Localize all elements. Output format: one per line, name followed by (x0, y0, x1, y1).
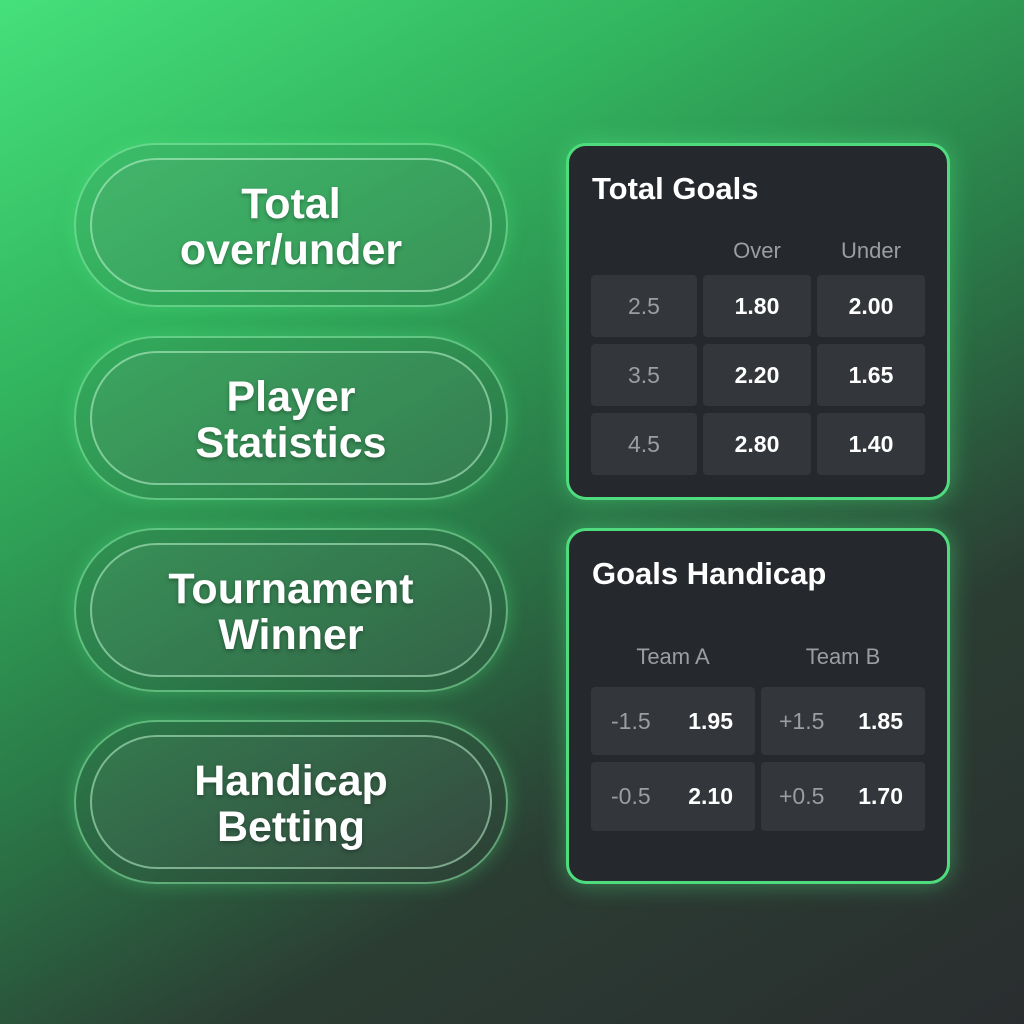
heading: Goals Handicap (592, 556, 826, 591)
panel: Goals Handicap (566, 528, 950, 884)
pill: Player Statistics: Player (226, 373, 356, 421)
pill: Total over/under: Total (241, 180, 341, 228)
panel: Total Goals: 2.00 (849, 292, 893, 318)
header Under: Under (841, 238, 901, 263)
panel: Goals Handicap: +0.5 (779, 783, 824, 809)
panel: Total Goals: 1.65 (849, 362, 893, 388)
pill: Tournament Winner (74, 528, 508, 692)
panel: Goals Handicap: 2.10 (688, 783, 733, 809)
pill: Tournament Winner: Winner (218, 611, 364, 659)
panel: Total Goals: 1.40 (849, 430, 893, 456)
panel: Goals Handicap: 1.70 (858, 783, 903, 809)
panel: Goals Handicap: 1.95 (688, 708, 733, 734)
panel: Total Goals (566, 143, 950, 500)
panel: Total Goals: 2.5 (628, 292, 660, 318)
panel: Total Goals: 3.5 (628, 362, 660, 388)
pill: Total over/under: over/under (180, 226, 402, 274)
header Over: Over (733, 238, 781, 263)
heading: Total Goals (592, 171, 759, 206)
panel: Total Goals: 4.5 (628, 430, 660, 456)
pill: Handicap Betting: Betting (217, 803, 365, 851)
panel: Total Goals: 1.80 (735, 292, 779, 318)
panel: Goals Handicap: -1.5 (611, 708, 651, 734)
panel: Goals Handicap: -0.5 (611, 783, 651, 809)
panel: Total Goals: 2.20 (735, 362, 779, 388)
table (591, 275, 925, 475)
table (591, 687, 925, 831)
pill: Total over/under (74, 143, 508, 307)
pill: Handicap Betting: Handicap (194, 757, 388, 805)
panel: Total Goals: 2.80 (735, 430, 779, 456)
header Team B: Team B (806, 644, 880, 669)
panel: Goals Handicap: 1.85 (858, 708, 903, 734)
pill: Tournament Winner: Tournament (168, 565, 414, 613)
pill: Player Statistics: Statistics (195, 419, 387, 467)
header Team A: Team A (636, 644, 710, 669)
pill: Player Statistics (74, 336, 508, 500)
pill: Handicap Betting (74, 720, 508, 884)
panel: Goals Handicap: +1.5 (779, 708, 824, 734)
